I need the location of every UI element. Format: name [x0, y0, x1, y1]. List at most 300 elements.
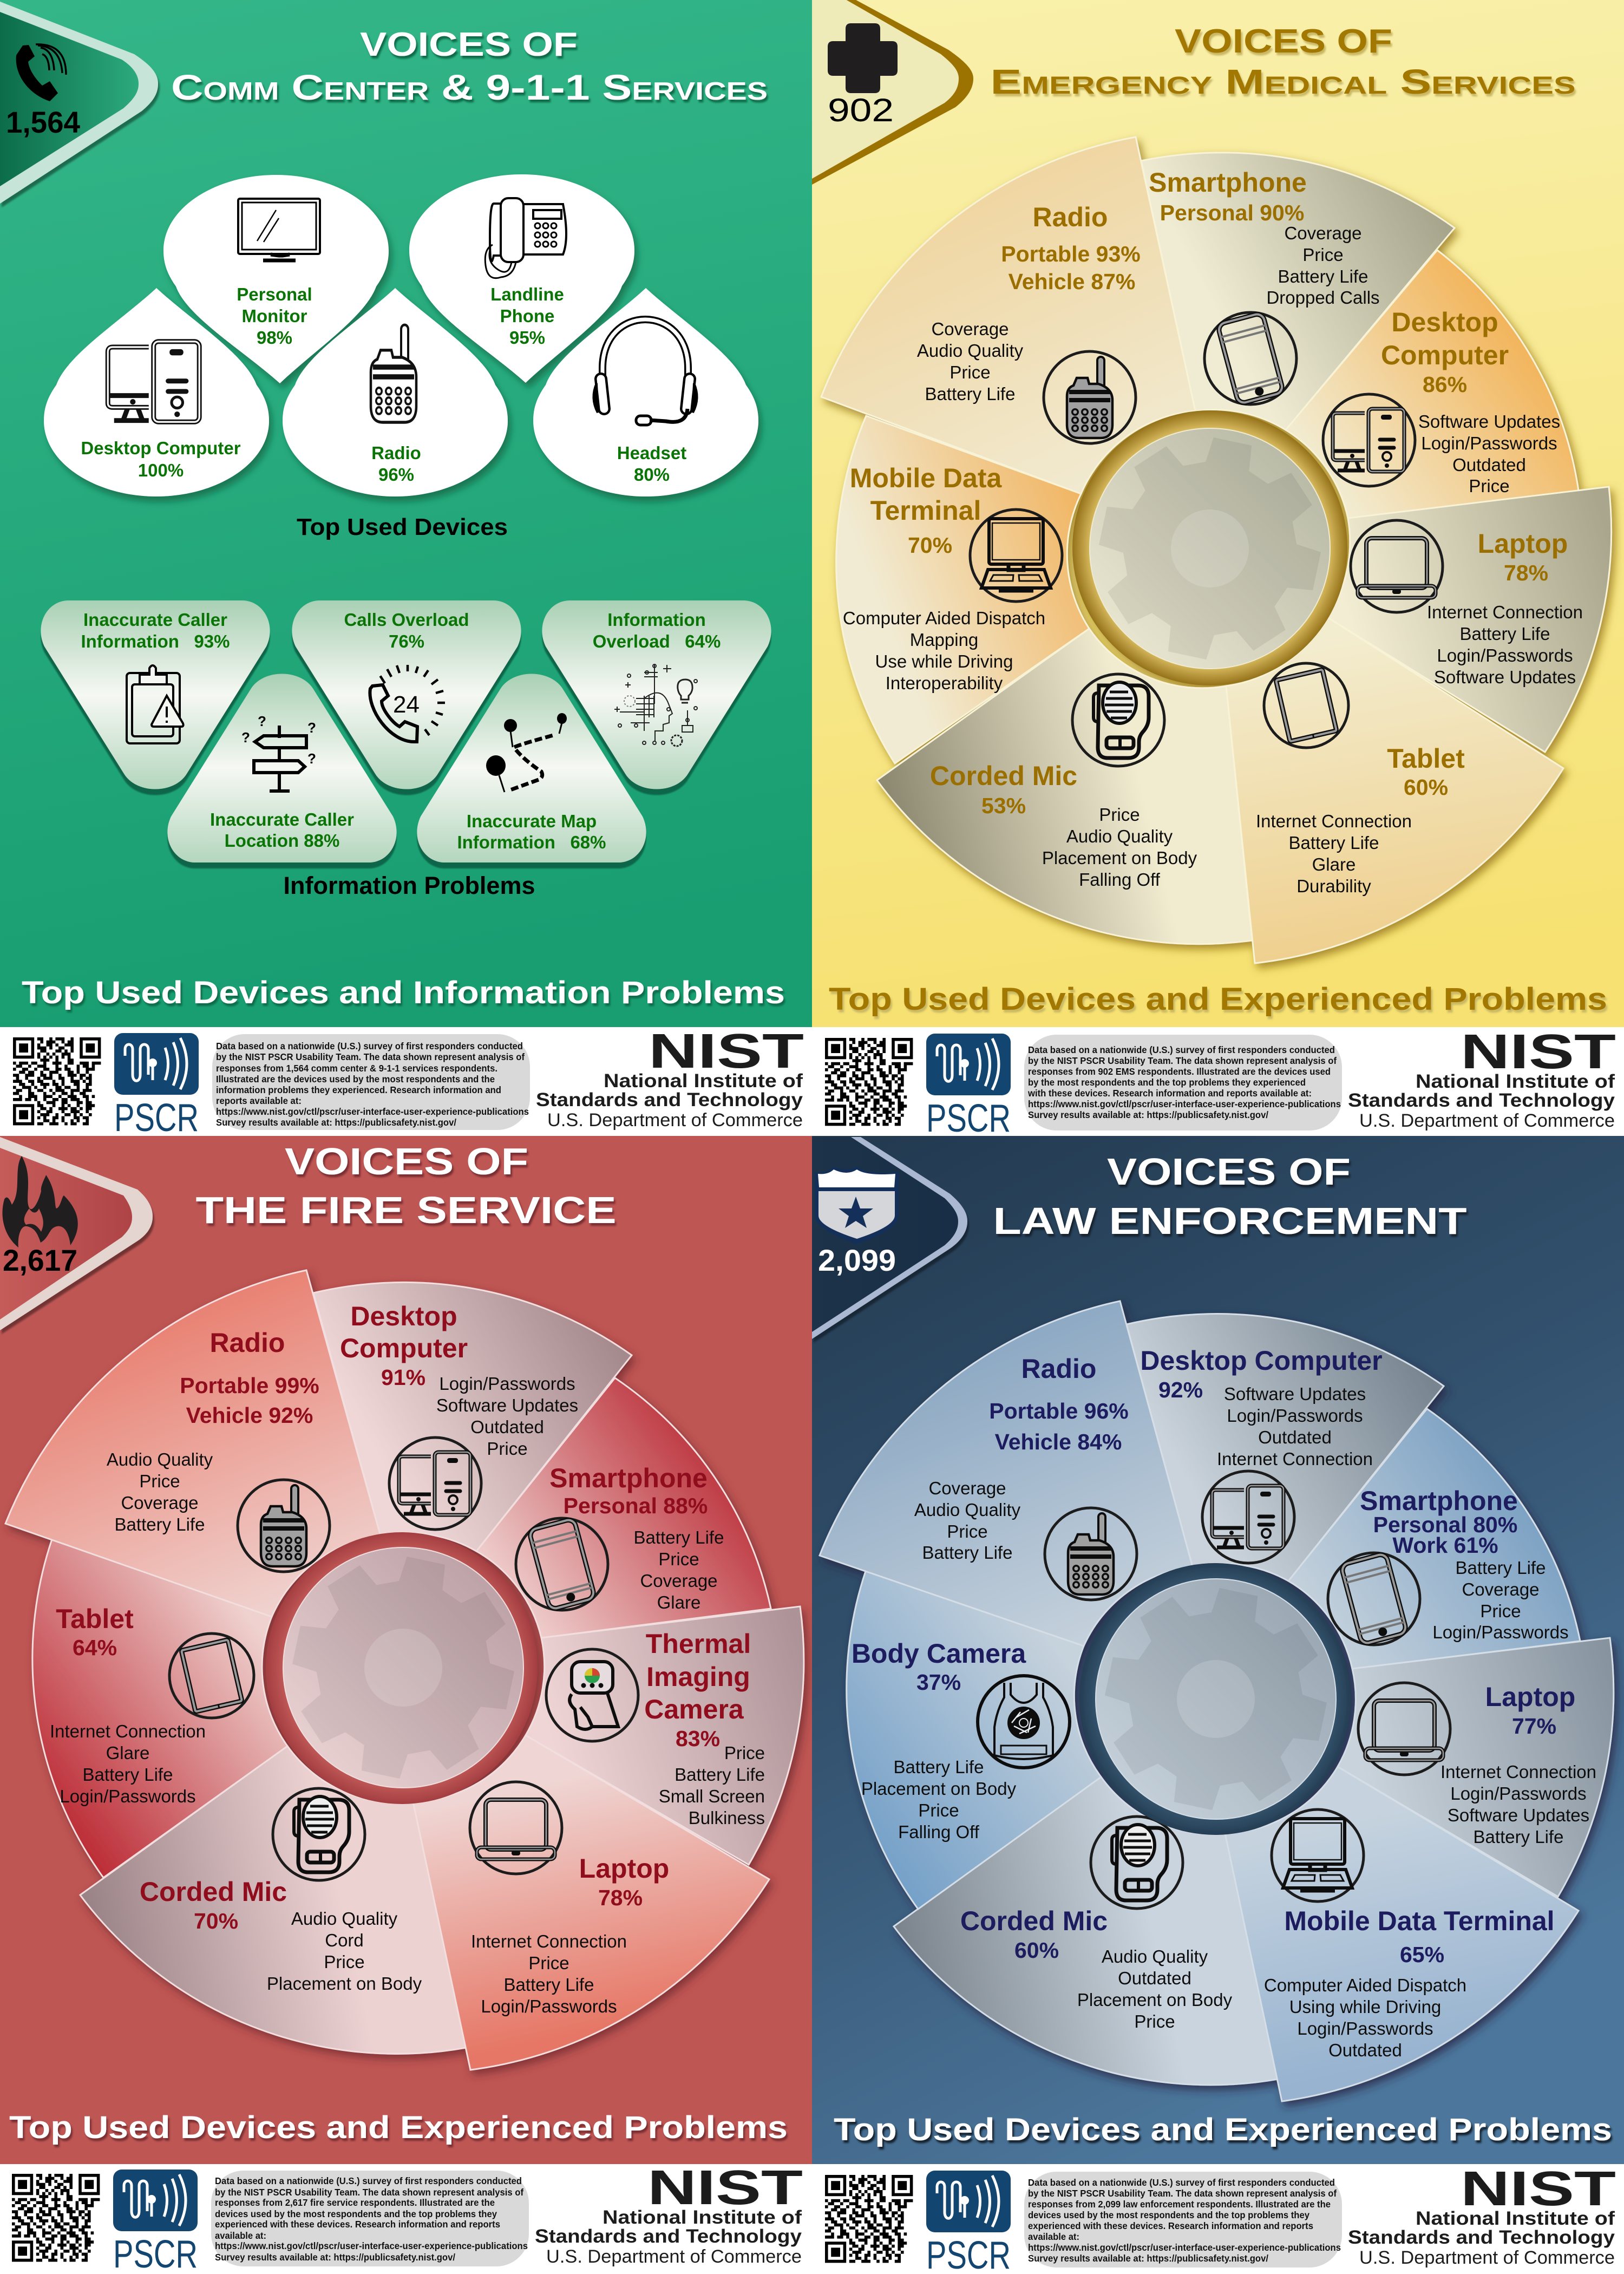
heading: Smartphone [1149, 167, 1307, 198]
icon: thermal camera [546, 1649, 638, 1741]
problems: Outdated [1328, 2040, 1402, 2060]
banner title: Top Used Devices and Information Problems [22, 975, 785, 1010]
heading: Laptop [1485, 1682, 1575, 1712]
label: Personal [237, 284, 312, 304]
label: Information 68% [457, 832, 606, 852]
heading: Corded Mic [140, 1877, 287, 1907]
triangle: inaccurate caller location [167, 674, 397, 862]
label: 96% [378, 465, 414, 485]
problems: Price [1302, 245, 1344, 265]
problems: Placement on Body [267, 1974, 422, 1994]
label: Inaccurate Caller [210, 809, 354, 829]
triangle: inaccurate caller information [41, 600, 270, 789]
heading: Vehicle 84% [995, 1429, 1122, 1454]
problems: Battery Life [83, 1765, 173, 1785]
heading: 91% [381, 1365, 425, 1390]
label: Information [607, 610, 706, 630]
heading: Personal 80% [1373, 1512, 1517, 1537]
segment: mobile data terminal [836, 416, 1089, 763]
label: Location 88% [225, 831, 339, 851]
problems: Audio Quality [291, 1909, 397, 1929]
drop: radio [283, 288, 508, 496]
label: Landline [490, 284, 564, 304]
title [991, 23, 1575, 101]
heading: 86% [1423, 372, 1467, 397]
data note: by the NIST PSCR Usability Team. The data shown represent analysis of [215, 2187, 523, 2198]
icon: corded mic [273, 1788, 365, 1880]
heading: Imaging [646, 1662, 750, 1692]
icon: mobile data terminal [1272, 1809, 1364, 1901]
PSCR logo: PSCR [114, 1096, 199, 1140]
segment: laptop [413, 1735, 769, 2070]
heading: 78% [1504, 560, 1548, 585]
problems: Price [1134, 2011, 1175, 2031]
problems: Software Updates [1418, 411, 1560, 432]
segment: radio [5, 1270, 381, 1617]
problems: Login/Passwords [1437, 645, 1573, 665]
triangle: calls overload [292, 600, 521, 789]
icon: mobile data terminal [970, 509, 1062, 602]
data note [212, 1034, 530, 1130]
heading: Vehicle 92% [186, 1403, 313, 1428]
heading: 53% [981, 793, 1026, 818]
NIST logo: NIST [647, 2161, 803, 2215]
segment: smartphone [1288, 1409, 1580, 1669]
heading: 77% [1512, 1714, 1556, 1739]
PSCR logo [113, 2170, 198, 2274]
title: VOICES OF [360, 26, 578, 63]
problems: Battery Life [1289, 833, 1379, 853]
segment: laptop [1338, 1638, 1614, 1897]
icon: medical cross [828, 23, 898, 93]
label: Inaccurate Caller [83, 610, 227, 630]
NIST logo: NIST [1461, 2162, 1616, 2216]
badge: respondents 2,617 [0, 1137, 153, 1330]
heading: Laptop [1478, 528, 1568, 559]
data note: with these devices. Research information and reports available at: [1027, 1088, 1312, 1099]
heading: Desktop [1391, 307, 1498, 337]
heading: Mobile Data [850, 463, 1001, 493]
problems: Price [1480, 1601, 1521, 1621]
data note: responses from 2,617 fire service respondents. Illustrated are the [215, 2197, 495, 2208]
segment: radio [820, 1301, 1193, 1646]
heading: Body Camera [852, 1638, 1026, 1669]
data note: Illustrated are the devices used by the most respondents and the [216, 1074, 495, 1084]
badge: respondents 1,564 [0, 2, 158, 204]
data note [211, 2171, 529, 2266]
data note: experienced with these devices. Research information and reports [215, 2219, 500, 2230]
data note: available at: [215, 2230, 266, 2241]
problems: Internet Connection [1440, 1762, 1596, 1782]
label: 80% [634, 465, 670, 485]
problems: Placement on Body [861, 1779, 1017, 1799]
data note: devices used by the most respondents and the top problems they [1028, 2210, 1309, 2220]
heading: Camera [644, 1694, 744, 1724]
label: Monitor [242, 306, 307, 326]
heading: Desktop [350, 1301, 457, 1331]
QR code [13, 1037, 101, 1125]
heading: Terminal [870, 495, 981, 526]
problems: Price [324, 1952, 365, 1972]
label: Calls Overload [344, 610, 469, 630]
problems: Login/Passwords [60, 1786, 196, 1806]
segment: mobile data terminal [1225, 1767, 1579, 2101]
problems: Price [949, 362, 991, 382]
footer: EMS [812, 1025, 1624, 1140]
problems: Price [487, 1439, 528, 1459]
icon: AI head circuit [614, 664, 697, 746]
heading: Portable 96% [989, 1399, 1129, 1423]
problems: Small Screen [659, 1786, 765, 1806]
title [171, 26, 768, 107]
segment: smartphone [1141, 153, 1455, 430]
icon: smartphone [1328, 1553, 1420, 1645]
heading: Radio [210, 1328, 285, 1358]
data note [1024, 2172, 1342, 2268]
heading: information problems: Information Problems [284, 872, 535, 899]
icon: corded mic [1072, 674, 1164, 766]
NIST logo: National Institute of [1416, 1071, 1615, 1092]
label: 100% [138, 460, 184, 480]
icon: telephone handset [16, 44, 66, 101]
segment: body camera [847, 1571, 1101, 1909]
heading: Laptop [579, 1853, 669, 1884]
data note: by the NIST PSCR Usability Team. The data shown represent analysis of [1028, 2188, 1337, 2199]
NIST logo: U.S. Department of Commerce [1359, 1110, 1615, 1131]
banner title: Top Used Devices and Experienced Problems [829, 982, 1607, 1017]
NIST logo: Standards and Technology [536, 1089, 803, 1110]
heading: Corded Mic [930, 761, 1077, 791]
icon: radio [238, 1480, 330, 1572]
problems: Battery Life [1456, 1558, 1546, 1578]
count: 902: 902 [828, 92, 894, 128]
problems: Audio Quality [1066, 826, 1173, 846]
label: Phone [500, 306, 554, 326]
problems: Software Updates [1224, 1384, 1366, 1404]
data note: by the most respondents and the top problems they experienced [1028, 1077, 1306, 1088]
QR code [12, 2174, 100, 2262]
data note: by the NIST PSCR Usability Team. The data shown represent analysis of [1028, 1055, 1337, 1066]
icon: signpost question marks: ? [241, 729, 250, 746]
problems: Using while Driving [1289, 1997, 1441, 2017]
data note [1024, 1035, 1342, 1131]
NIST logo: U.S. Department of Commerce [1359, 2247, 1615, 2268]
problems: Placement on Body [1077, 1990, 1233, 2010]
data note: Survey results available at: https://publicsafety.nist.gov/ [216, 1117, 456, 1128]
drop: landline phone [409, 174, 634, 383]
problems: Audio Quality [917, 341, 1024, 361]
wheel chart: fire service devices [5, 1270, 804, 2070]
data note: experienced with these devices. Research information and reports [1028, 2220, 1313, 2231]
drop: personal monitor [163, 175, 389, 383]
title [993, 1151, 1467, 1242]
problems: Price [139, 1471, 180, 1491]
problems: Glare [657, 1592, 700, 1612]
badge: respondents 902 [812, 0, 973, 185]
QR code [825, 1038, 913, 1126]
data note: Survey results available at: https://publicsafety.nist.gov/ [1028, 2253, 1268, 2264]
title: Emergency Medical Services [991, 62, 1575, 101]
problems: Glare [106, 1743, 149, 1763]
segment: desktop computer [1286, 250, 1579, 518]
data note: Data based on a nationwide (U.S.) survey of first responders conducted [1028, 2177, 1335, 2188]
problems: Login/Passwords [1297, 2018, 1433, 2038]
icon: body camera vest [978, 1676, 1070, 1768]
problems: Internet Connection [1427, 602, 1583, 622]
problems: Software Updates [436, 1395, 578, 1415]
PSCR logo [926, 1034, 1011, 1140]
segment: tablet [1226, 617, 1563, 963]
problems: Login/Passwords [1421, 433, 1557, 453]
center gear [1079, 1563, 1351, 1835]
data note: https://www.nist.gov/ctl/pscr/user-interface-user-experience-publications [215, 2240, 528, 2251]
icon: smartphone [516, 1518, 608, 1610]
problems: Login/Passwords [1432, 1622, 1569, 1642]
icon: police shield [815, 1166, 899, 1244]
label: Radio [371, 443, 421, 463]
title: LAW ENFORCEMENT [993, 1200, 1467, 1242]
label: Overload 64% [593, 631, 721, 651]
icon: desktop [389, 1437, 481, 1530]
icon: smartphone [1204, 312, 1296, 404]
NIST logo: Standards and Technology [1348, 1090, 1615, 1111]
panel: emergency medical services [812, 0, 1624, 1027]
problems: Battery Life [1278, 266, 1368, 286]
segment: thermal imaging camera [526, 1606, 804, 1865]
problems: Price [1099, 805, 1140, 825]
drop: desktop computer [44, 288, 269, 496]
count: 2,617: 2,617 [3, 1243, 77, 1277]
label: Information 93% [81, 631, 230, 651]
NIST logo [535, 2161, 803, 2267]
NIST logo: National Institute of [1416, 2208, 1615, 2229]
icon: signpost question marks: ? [258, 713, 266, 729]
title: Comm Center & 9-1-1 Services [171, 67, 768, 107]
data note: responses from 1,564 comm center & 9-1-1 services respondents. [216, 1063, 497, 1074]
icon: signpost question marks [241, 713, 316, 792]
problems: Interoperability [886, 673, 1003, 693]
icon: desktop [1202, 1471, 1294, 1563]
heading: Thermal [646, 1629, 751, 1659]
segment: corded mic [80, 1746, 466, 2054]
NIST logo: NIST [649, 1024, 804, 1079]
problems: Coverage [640, 1571, 718, 1591]
segment: radio [821, 137, 1195, 494]
problems: Battery Life [504, 1975, 594, 1995]
problems: Outdated [470, 1417, 544, 1437]
icon: tablet [169, 1633, 254, 1718]
wheel chart: EMS devices [821, 137, 1612, 963]
problems: Durability [1296, 876, 1371, 896]
heading: 60% [1404, 775, 1448, 800]
segment: smartphone [476, 1378, 771, 1638]
heading: Personal 88% [564, 1493, 708, 1518]
heading: Radio [1033, 202, 1108, 232]
label: 76% [389, 631, 424, 651]
label: Headset [617, 443, 686, 463]
label: 98% [257, 328, 292, 348]
problems: Price [1469, 476, 1510, 496]
problems: Battery Life [925, 384, 1015, 404]
data note: Data based on a nationwide (U.S.) survey of first responders conducted [215, 2175, 522, 2186]
footer: comm center [0, 1024, 812, 1140]
segment: desktop computer [1127, 1314, 1444, 1581]
wheel chart: law enforcement devices [820, 1301, 1614, 2101]
problems: Battery Life [675, 1765, 765, 1785]
icon: laptop [1358, 1683, 1450, 1775]
label: 95% [509, 328, 545, 348]
heading: 92% [1158, 1377, 1203, 1402]
data note: information problems they experienced. Research information and [216, 1084, 501, 1095]
NIST logo [536, 1024, 804, 1131]
NIST logo: Standards and Technology [535, 2226, 802, 2247]
problems: Battery Life [922, 1543, 1012, 1563]
problems: Coverage [928, 1478, 1006, 1498]
problems: Outdated [1452, 455, 1526, 475]
icon: laptop [470, 1782, 562, 1874]
triangle: information overload [542, 600, 771, 789]
problems: Dropped Calls [1266, 287, 1380, 308]
heading: Personal 90% [1160, 200, 1304, 225]
footer: fire service [0, 2161, 812, 2274]
icon: signpost question marks: ? [307, 720, 316, 736]
heading: 64% [73, 1635, 117, 1660]
heading: Work 61% [1392, 1533, 1498, 1558]
problems: Battery Life [634, 1527, 724, 1547]
problems: Mapping [910, 630, 978, 650]
problems: Coverage [931, 319, 1009, 339]
problems: Battery Life [1474, 1827, 1563, 1847]
segment: desktop computer [313, 1282, 632, 1551]
heading: 70% [908, 533, 952, 558]
problems: Internet Connection [1217, 1449, 1373, 1469]
panel: law enforcement [812, 1136, 1624, 2164]
panel: comm center and 9-1-1 services [0, 0, 812, 1027]
banner title: Top Used Devices and Experienced Problems [834, 2112, 1612, 2147]
data note: by the NIST PSCR Usability Team. The data shown represent analysis of [216, 1051, 525, 1062]
icon: desktop [108, 342, 199, 422]
icon: headset [593, 319, 697, 425]
segment: corded mic [894, 1777, 1278, 2085]
panel: the fire service [0, 1136, 812, 2164]
problems: Outdated [1258, 1427, 1332, 1447]
problems: Cord [325, 1930, 364, 1950]
problems: Internet Connection [471, 1931, 627, 1951]
icon: corded mic [1091, 1816, 1183, 1909]
icon: radio [1044, 351, 1136, 443]
title: VOICES OF [1107, 1151, 1351, 1193]
data note: available at: [1028, 2231, 1079, 2242]
NIST logo: National Institute of [604, 1070, 803, 1092]
problems: Glare [1312, 854, 1355, 874]
heading: Tablet [56, 1604, 134, 1634]
data note: Survey results available at: https://publicsafety.nist.gov/ [1028, 1109, 1268, 1120]
QR code [825, 2175, 913, 2263]
data note: responses from 902 EMS respondents. Illustrated are the devices used [1028, 1066, 1331, 1077]
NIST logo: U.S. Department of Commerce [546, 2246, 802, 2267]
problems: Coverage [121, 1493, 199, 1513]
problems: Battery Life [1460, 624, 1550, 644]
heading: Vehicle 87% [1009, 269, 1135, 294]
PSCR logo [114, 1033, 199, 1140]
problems: Login/Passwords [1227, 1406, 1363, 1426]
problems: Battery Life [115, 1514, 205, 1534]
heading: Computer [1381, 340, 1509, 370]
problems: Price [528, 1953, 569, 1973]
segment: corded mic [877, 629, 1252, 944]
label: Inaccurate Map [467, 811, 597, 831]
heading: Mobile Data Terminal [1284, 1906, 1555, 1936]
problems: Internet Connection [50, 1721, 206, 1741]
heading: Smartphone [1360, 1486, 1518, 1516]
icon: radio [371, 325, 416, 422]
icon: signpost question marks: ? [307, 750, 316, 767]
problems: Audio Quality [1102, 1946, 1208, 1966]
title: VOICES OF [1175, 23, 1392, 60]
segment: laptop [1327, 487, 1612, 752]
problems: Software Updates [1448, 1805, 1589, 1825]
PSCR logo [926, 2171, 1011, 2274]
title: VOICES OF [285, 1140, 528, 1182]
NIST logo [1348, 1025, 1616, 1131]
data note: Survey results available at: https://publicsafety.nist.gov/ [215, 2252, 455, 2263]
problems: Audio Quality [107, 1449, 213, 1469]
data note: Data based on a nationwide (U.S.) survey of first responders conducted [216, 1041, 523, 1051]
problems: Price [724, 1743, 765, 1763]
data note: https://www.nist.gov/ctl/pscr/user-interface-user-experience-publications [1028, 2242, 1341, 2253]
data note: responses from 2,099 law enforcement respondents. Illustrated are the [1028, 2199, 1331, 2210]
problems: Price [947, 1521, 988, 1541]
heading: 65% [1400, 1942, 1444, 1967]
icon: clipboard warning [127, 665, 184, 743]
count: 2,099: 2,099 [818, 1243, 896, 1277]
problems: Price [658, 1549, 699, 1569]
icon: desktop [1323, 394, 1415, 486]
problems: Falling Off [898, 1822, 980, 1842]
badge: respondents 2,099 [812, 1137, 967, 1339]
footer: law enforcement [812, 2162, 1624, 2274]
NIST logo: Standards and Technology [1348, 2227, 1615, 2248]
center gear [1072, 410, 1347, 685]
heading: 60% [1014, 1938, 1059, 1963]
drop: headset [533, 288, 758, 496]
heading: Computer [340, 1333, 468, 1363]
problems: Placement on Body [1042, 848, 1197, 868]
problems: Use while Driving [875, 651, 1013, 671]
icon: monitor [238, 199, 320, 260]
problems: Bulkiness [689, 1808, 765, 1828]
problems: Login/Passwords [481, 1996, 617, 2016]
label: Desktop Computer [81, 438, 241, 458]
problems: Audio Quality [914, 1500, 1021, 1520]
heading: 37% [916, 1670, 961, 1695]
count: 1,564: 1,564 [6, 105, 80, 139]
icon: map pins route [486, 713, 567, 792]
NIST logo [1348, 2162, 1616, 2268]
heading: Desktop Computer [1140, 1345, 1383, 1376]
banner title: Top Used Devices and Experienced Problems [9, 2110, 788, 2145]
problems: Login/Passwords [439, 1374, 575, 1394]
heading: 70% [194, 1909, 238, 1933]
NIST logo: National Institute of [603, 2207, 802, 2228]
problems: Falling Off [1079, 870, 1161, 890]
heading: top used devices: Top Used Devices [297, 514, 508, 540]
problems: Computer Aided Dispatch [843, 608, 1045, 628]
title: THE FIRE SERVICE [196, 1189, 616, 1231]
segment: tablet [32, 1539, 287, 1878]
problems: Outdated [1118, 1968, 1191, 1988]
icon: tablet [1264, 663, 1348, 748]
